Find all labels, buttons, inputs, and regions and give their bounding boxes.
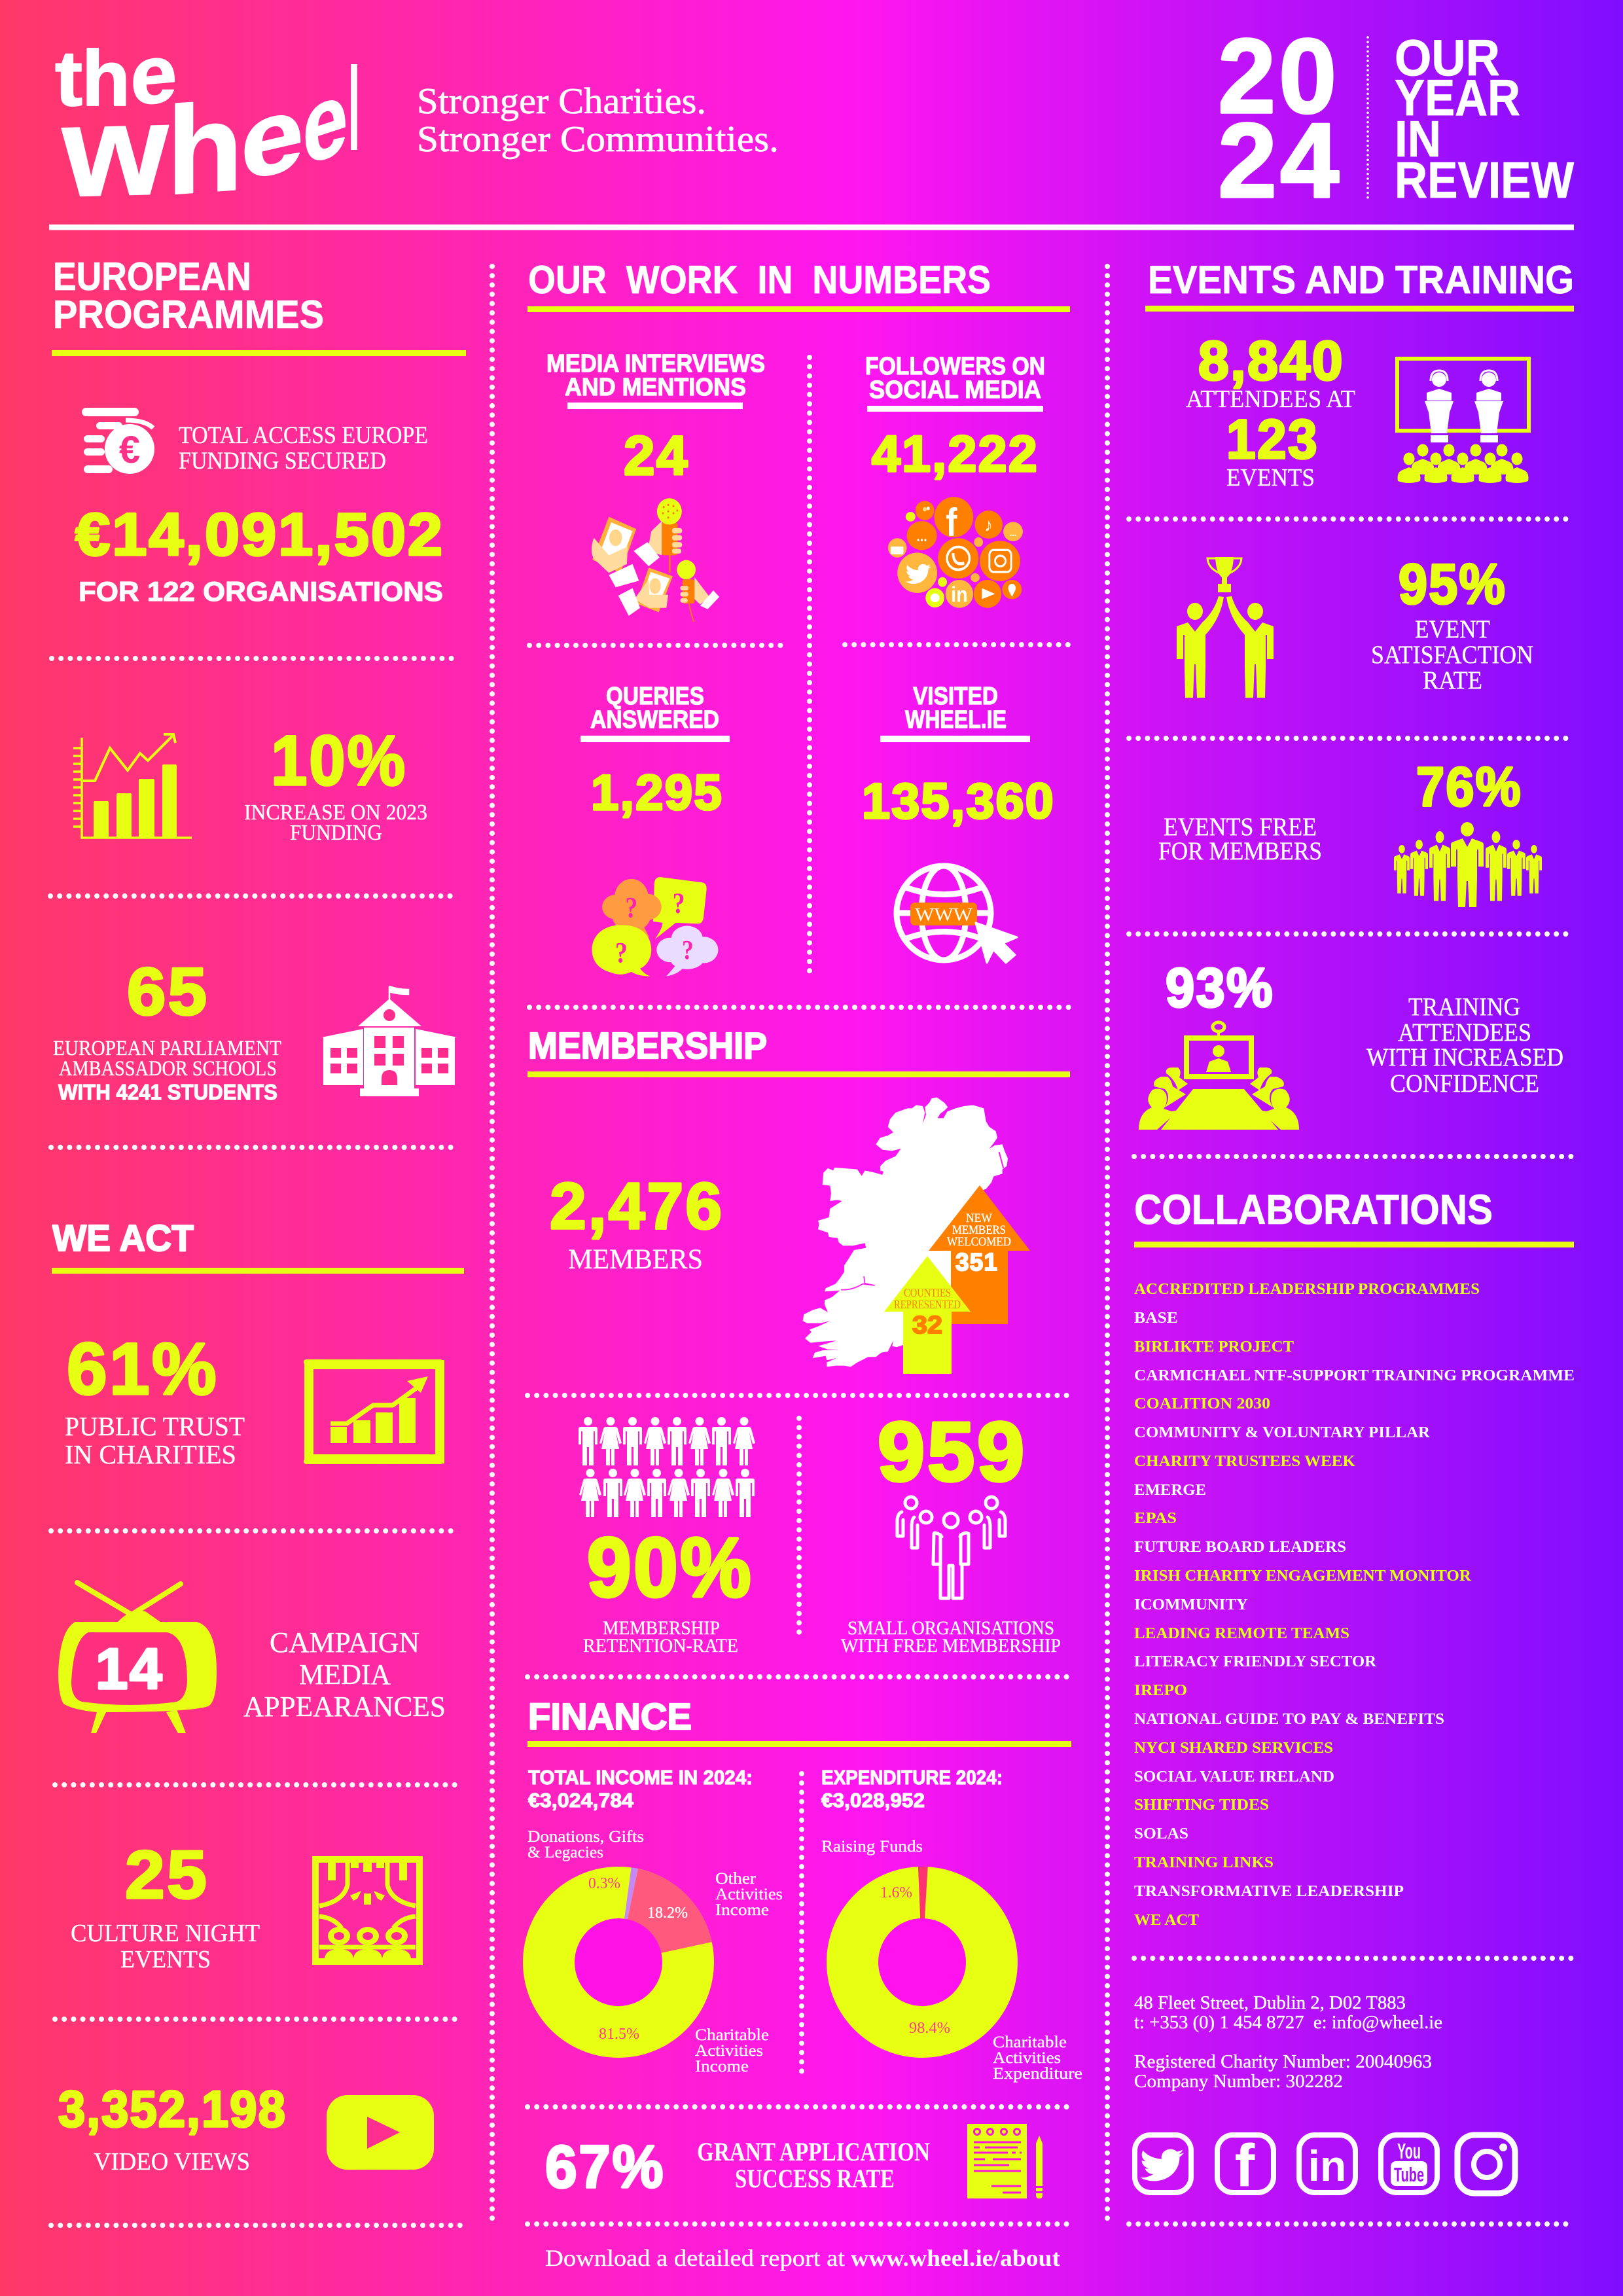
panel: our work in numbers: [527, 258, 1070, 1007]
list of collaborations: NYCI SHARED SERVICES: [1134, 1740, 1333, 1757]
contact details: 48 Fleet Street, Dublin 2, D02 T883: [1134, 1993, 1406, 2013]
stat: 10 percent: 10%: [271, 721, 407, 800]
stat: retention rate: [583, 1521, 753, 1657]
list of collaborations: TRANSFORMATIVE LEADERSHIP: [1134, 1883, 1404, 1900]
icon: social media bubbles: in: [951, 582, 968, 607]
icon: social media bubbles: [888, 497, 1023, 608]
expenditure total: EXPENDITURE 2024:: [821, 1766, 1003, 1789]
pictogram: member figures: [579, 1417, 755, 1517]
logo: the wheel: e: [131, 26, 177, 122]
icon: question bubbles: ?: [682, 935, 694, 965]
income chart labels: Income: [715, 1901, 769, 1919]
list of collaborations: IRISH CHARITY ENGAGEMENT MONITOR: [1134, 1568, 1472, 1585]
income total: €3,024,784: [528, 1789, 634, 1812]
icon: theatre stage: [315, 1859, 419, 1962]
icon: linkedin: in: [1308, 2142, 1346, 2190]
stat: grant success: GRANT APPLICATION: [697, 2137, 930, 2166]
stat block: social followers: FOLLOWERS ON: [865, 353, 1045, 380]
panel: collaborations: [1129, 1186, 1575, 2224]
stat block: queries answered: 1,295: [591, 765, 723, 821]
list of collaborations: NATIONAL GUIDE TO PAY & BENEFITS: [1134, 1711, 1444, 1728]
tagline: Stronger Charities.: [417, 81, 706, 122]
stat: 93 percent: 93%: [1166, 957, 1274, 1018]
header: [55, 17, 1574, 224]
icon: question bubbles: ?: [615, 936, 628, 969]
list of collaborations: COMMUNITY & VOLUNTARY PILLAR: [1134, 1424, 1431, 1441]
stat: small organisations: SMALL ORGANISATIONS: [847, 1617, 1054, 1639]
income chart labels: & Legacies: [527, 1844, 603, 1861]
stat: 65 schools: 65: [127, 954, 209, 1029]
donut chart: expenditure: [827, 1867, 1018, 2058]
icon: globe with www cursor: WWW: [915, 905, 973, 925]
icon: television with 14: [58, 1583, 217, 1733]
list of collaborations: LEADING REMOTE TEAMS: [1134, 1625, 1349, 1642]
icon: presentation board: [304, 1359, 443, 1464]
heading: our work in numbers: OUR WORK IN NUMBERS: [528, 258, 991, 302]
logo: the wheel: l: [348, 45, 360, 175]
stat: grant success: 67%: [545, 2134, 665, 2200]
stat block: website visits: VISITED: [913, 683, 998, 710]
stat block: social followers: 41,222: [872, 425, 1039, 482]
list of collaborations: ACCREDITED LEADERSHIP PROGRAMMES: [1134, 1281, 1480, 1298]
icon: euro coin stack: €: [119, 429, 140, 471]
icon: notepad and pencil: [967, 2124, 1043, 2198]
donut chart: income: 18.2%: [647, 1905, 688, 1922]
our year in review: REVIEW: [1395, 151, 1574, 209]
income total: [528, 1766, 753, 1812]
campaign label: APPEARANCES: [243, 1691, 446, 1723]
our year in review: [1395, 29, 1574, 209]
icon: television with 14: 14: [96, 1636, 164, 1701]
icon: linkedin: [1299, 2135, 1355, 2193]
icon: question bubbles: ?: [625, 891, 637, 924]
icon: crowd of suited people: [1394, 822, 1542, 907]
events free label: FOR MEMBERS: [1158, 837, 1322, 865]
stat block: queries answered: ANSWERED: [590, 706, 719, 734]
video views label: VIDEO VIEWS: [94, 2148, 250, 2176]
icon: twitter: [1135, 2135, 1191, 2193]
arrow: new members: WELCOMED: [947, 1235, 1011, 1249]
public trust label: [65, 1411, 245, 1469]
income chart labels: [527, 1828, 783, 2075]
list of collaborations: IREPO: [1134, 1682, 1187, 1699]
heading: finance: FINANCE: [528, 1696, 692, 1738]
income chart labels: Donations, Gifts: [527, 1828, 644, 1846]
stat: video views number: 3,352,198: [58, 2080, 287, 2138]
panel: european programmes: [50, 255, 466, 1147]
expenditure chart labels: Activities: [993, 2049, 1061, 2067]
map: ireland: [803, 1098, 1008, 1367]
income chart labels: Other: [715, 1870, 757, 1888]
donut chart: expenditure: 98.4%: [909, 2020, 950, 2037]
campaign label: MEDIA: [299, 1659, 391, 1691]
heading: european programmes: PROGRAMMES: [53, 293, 324, 336]
icon: question bubbles: ?: [673, 887, 685, 919]
arrow: new members: 351: [955, 1249, 998, 1276]
heading: membership: MEMBERSHIP: [528, 1025, 767, 1067]
stat: satisfaction: EVENT: [1415, 615, 1490, 643]
stat block: social followers: SOCIAL MEDIA: [869, 376, 1041, 404]
icon: outlined group of people: [897, 1497, 1005, 1598]
organisations count: FOR 122 ORGANISATIONS: [79, 576, 443, 607]
tagline: Stronger Communities.: [417, 119, 779, 160]
schools label: [53, 1037, 281, 1104]
stat block: website visits: WHEEL.IE: [905, 706, 1007, 734]
arrow: counties represented: 32: [912, 1312, 942, 1339]
heading: events and training: EVENTS AND TRAINING: [1148, 258, 1574, 302]
list of collaborations: LITERACY FRIENDLY SECTOR: [1134, 1653, 1377, 1670]
donut chart: income: 0.3%: [588, 1875, 620, 1892]
stat: attendees and events: EVENTS: [1226, 464, 1315, 492]
income total: TOTAL INCOME IN 2024:: [528, 1766, 753, 1789]
stat: attendees and events: 123: [1226, 408, 1319, 470]
donut chart: income: 81.5%: [599, 2026, 639, 2043]
stat block: media interviews: [546, 350, 765, 486]
our year in review: YEAR: [1395, 69, 1520, 126]
icon: growth chart: [73, 734, 192, 838]
logo: the wheel: e: [241, 71, 304, 203]
training confidence label: WITH INCREASED: [1366, 1043, 1563, 1071]
campaign label: CAMPAIGN: [270, 1626, 419, 1659]
stat: attendees and events: 8,840: [1198, 330, 1344, 391]
icons: social media links: [1135, 2132, 1515, 2199]
icon: youtube play button: [327, 2095, 434, 2170]
stat: 61 percent: 61%: [67, 1328, 219, 1410]
icon: conference speakers: [1397, 359, 1529, 483]
income chart labels: Activities: [695, 2042, 763, 2060]
list of collaborations: [1134, 1281, 1575, 1929]
list of collaborations: EPAS: [1134, 1510, 1177, 1527]
expenditure chart labels: Raising Funds: [821, 1838, 923, 1856]
funding amount: €14,091,502: [75, 501, 444, 568]
icon: youtube: [1381, 2135, 1437, 2193]
icon: social media bubbles: f: [946, 500, 957, 545]
increase label: [244, 800, 427, 845]
logo: the wheel: h: [167, 77, 243, 221]
stat: retention rate: MEMBERSHIP: [603, 1617, 720, 1639]
stat: attendees and events: ATTENDEES AT: [1186, 386, 1355, 413]
stat: satisfaction: RATE: [1423, 666, 1482, 694]
footer: download link: [545, 2245, 1060, 2271]
arrow: counties represented: [884, 1256, 971, 1374]
stat block: social followers: [865, 353, 1045, 482]
icon: two people raising trophy: [1177, 557, 1274, 698]
icon: youtube: You: [1397, 2139, 1421, 2163]
arrow: counties represented: REPRESENTED: [894, 1298, 961, 1311]
funding label: FUNDING SECURED: [179, 448, 386, 475]
schools label: WITH 4241 STUDENTS: [58, 1080, 277, 1104]
contact details: Company Number: 302282: [1134, 2072, 1343, 2092]
stat: grant success: SUCCESS RATE: [735, 2164, 895, 2193]
panel: we act: [51, 1217, 464, 2225]
stat: satisfaction: SATISFACTION: [1371, 641, 1533, 669]
contact details: Registered Charity Number: 20040963: [1134, 2052, 1432, 2072]
heading: european programmes: EUROPEAN: [53, 255, 251, 298]
funding label: TOTAL ACCESS EUROPE: [179, 422, 428, 449]
icon: globe with www cursor: [897, 866, 1017, 963]
funding label: [179, 422, 428, 475]
stat: small organisations: WITH FREE MEMBERSHIP: [841, 1635, 1061, 1657]
schools label: AMBASSADOR SCHOOLS: [59, 1057, 277, 1081]
our year in review: IN: [1395, 110, 1441, 168]
stat: total members: 2,476: [550, 1170, 724, 1243]
logo: the wheel: e: [303, 57, 348, 187]
icon: social media bubbles: ♪: [985, 514, 993, 535]
panel: events and training: [1129, 258, 1574, 1157]
schools label: EUROPEAN PARLIAMENT: [53, 1037, 281, 1060]
stat: grant success: [545, 2134, 930, 2200]
stat block: media interviews: AND MENTIONS: [565, 374, 746, 401]
stat: 76 percent: 76%: [1416, 756, 1522, 817]
stat: total members: MEMBERS: [568, 1244, 703, 1275]
icon: euro coin stack: [82, 408, 154, 474]
logo: the wheel: w: [62, 77, 169, 224]
training confidence label: TRAINING: [1408, 993, 1520, 1021]
icon: social media bubbles: ...: [1010, 528, 1016, 538]
culture night label: EVENTS: [120, 1946, 211, 1973]
logo: the wheel: t: [55, 35, 82, 122]
expenditure chart labels: [821, 1838, 1082, 2083]
icon: microphones and phones: [592, 498, 719, 622]
list of collaborations: FUTURE BOARD LEADERS: [1134, 1539, 1346, 1556]
expenditure total: €3,028,952: [821, 1789, 925, 1812]
training confidence label: [1366, 993, 1563, 1098]
expenditure chart labels: Charitable: [993, 2034, 1067, 2051]
income chart labels: Income: [695, 2058, 749, 2075]
tagline: [417, 81, 779, 160]
events free label: [1158, 813, 1322, 865]
list of collaborations: CHARITY TRUSTEES WEEK: [1134, 1453, 1355, 1470]
arrow: new members: MEMBERS: [952, 1223, 1006, 1237]
arrow: new members: NEW: [966, 1211, 992, 1225]
list of collaborations: SHIFTING TIDES: [1134, 1797, 1269, 1814]
stat: total members: [550, 1170, 724, 1275]
public trust label: IN CHARITIES: [65, 1439, 236, 1469]
expenditure chart labels: Expenditure: [993, 2065, 1082, 2083]
stat block: queries answered: [580, 683, 730, 821]
heading: we act: [52, 1217, 464, 1274]
stat: satisfaction: [1371, 553, 1533, 694]
donut chart: income: [523, 1867, 714, 2058]
list of collaborations: SOCIAL VALUE IRELAND: [1134, 1768, 1334, 1785]
stat: 25 events: 25: [125, 1837, 209, 1913]
logo: the wheel: h: [82, 35, 130, 122]
increase label: INCREASE ON 2023: [244, 800, 427, 825]
contact details: t: +353 (0) 1 454 8727 e: info@wheel.ie: [1134, 2013, 1442, 2033]
year 2024: 20: [1218, 17, 1340, 135]
panel: membership: [527, 1025, 1070, 1657]
increase label: FUNDING: [290, 821, 382, 845]
culture night label: [71, 1920, 260, 1973]
stat: attendees and events: [1186, 330, 1355, 492]
expenditure total: [821, 1766, 1003, 1812]
icon: instagram: [1457, 2135, 1515, 2193]
icon: facebook: [1217, 2132, 1274, 2199]
list of collaborations: WE ACT: [1134, 1912, 1199, 1929]
stat: small organisations: 959: [878, 1405, 1027, 1499]
icon: social media bubbles: ...: [916, 529, 927, 545]
heading: finance: [527, 1696, 1071, 1747]
training confidence label: CONFIDENCE: [1390, 1069, 1539, 1098]
list of collaborations: BIRLIKTE PROJECT: [1134, 1338, 1294, 1355]
stat: satisfaction: 95%: [1399, 553, 1507, 616]
stat block: website visits: [862, 683, 1055, 829]
contact details: [1134, 1993, 1442, 2092]
donut chart: expenditure: 1.6%: [880, 1884, 912, 1901]
heading: collaborations: [1134, 1186, 1574, 1247]
icon: question bubbles: [592, 877, 718, 977]
logo: the wheel: [55, 26, 360, 224]
income chart labels: Charitable: [695, 2026, 769, 2044]
stat block: website visits: 135,360: [862, 774, 1055, 829]
arrow: counties represented: COUNTIES: [904, 1286, 951, 1299]
panel: finance: [523, 1696, 1082, 2200]
list of collaborations: COALITION 2030: [1134, 1395, 1270, 1412]
income chart labels: Activities: [715, 1886, 783, 1903]
stat: retention rate: 90%: [587, 1521, 753, 1615]
list of collaborations: EMERGE: [1134, 1482, 1206, 1499]
year 2024: 24: [1218, 101, 1342, 220]
icon: training room: [1139, 1022, 1299, 1130]
icon: school building: [321, 986, 457, 1096]
stat: retention rate: RETENTION-RATE: [583, 1635, 738, 1657]
icon: facebook: f: [1235, 2132, 1255, 2199]
heading: we act: WE ACT: [52, 1217, 194, 1259]
culture night label: CULTURE NIGHT: [71, 1920, 260, 1947]
list of collaborations: BASE: [1134, 1310, 1178, 1327]
footer: download link: Download a detailed report at: [545, 2245, 845, 2271]
stat block: media interviews: 24: [624, 425, 689, 486]
heading: membership: [527, 1025, 1070, 1077]
public trust label: PUBLIC TRUST: [65, 1411, 245, 1441]
list of collaborations: SOLAS: [1134, 1825, 1188, 1842]
stat block: media interviews: MEDIA INTERVIEWS: [546, 350, 765, 378]
footer: download link: www.wheel.ie/about: [851, 2245, 1060, 2271]
list of collaborations: TRAINING LINKS: [1134, 1854, 1274, 1871]
training confidence label: ATTENDEES: [1398, 1018, 1531, 1047]
heading: european programmes: [52, 255, 466, 356]
icon: youtube: Tube: [1394, 2163, 1424, 2186]
year 2024: [1218, 17, 1342, 220]
heading: collaborations: COLLABORATIONS: [1134, 1186, 1493, 1233]
list of collaborations: CARMICHAEL NTF-SUPPORT TRAINING PROGRAMME: [1134, 1367, 1575, 1384]
arrow: new members: [929, 1185, 1030, 1324]
events free label: EVENTS FREE: [1164, 813, 1317, 841]
stat: small organisations: [841, 1405, 1061, 1657]
list of collaborations: ICOMMUNITY: [1134, 1596, 1248, 1613]
our year in review: OUR: [1395, 29, 1500, 86]
stat block: queries answered: QUERIES: [606, 683, 704, 710]
campaign label: [243, 1626, 446, 1723]
map of ireland with arrows: [803, 1098, 1030, 1374]
